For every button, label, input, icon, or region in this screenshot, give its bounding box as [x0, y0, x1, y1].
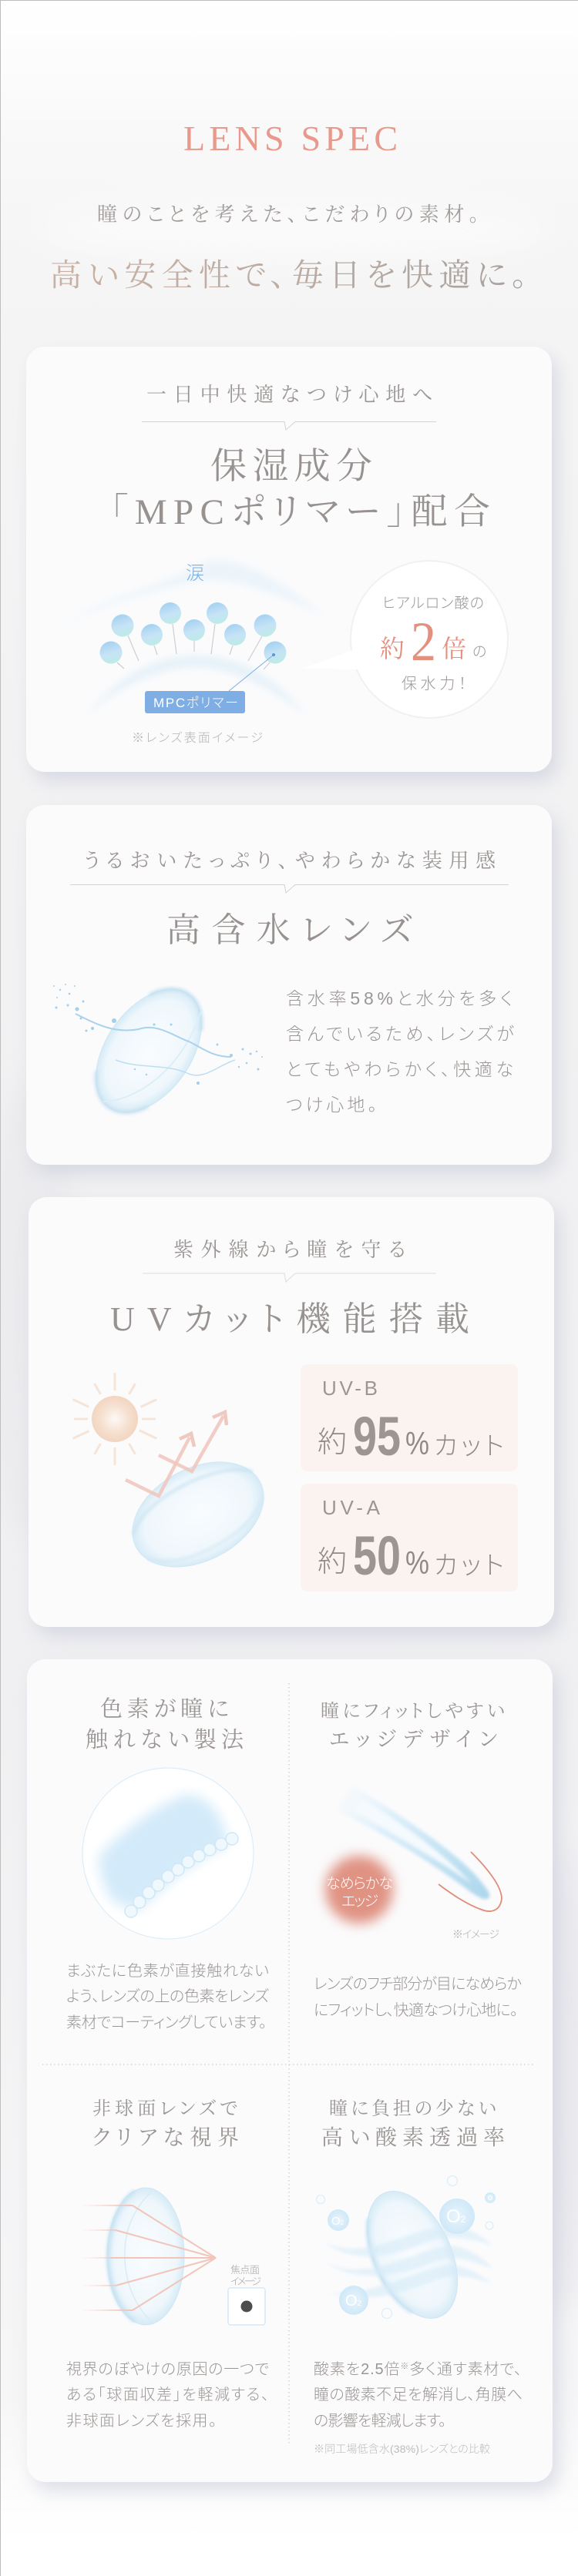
stat: UV-A 50%: 50 [353, 1526, 401, 1587]
feature text [314, 2360, 523, 2430]
oxygen bubbles: O2 [345, 2293, 362, 2309]
label: focal plane [230, 2264, 261, 2287]
illustration: lens with water splash [53, 970, 263, 1132]
illustration: oxygen passing through lens [316, 2175, 496, 2333]
polymer balls [100, 602, 287, 664]
note: image: ※イメージ [452, 1928, 499, 1940]
description text: つけ心地。 [286, 1095, 377, 1115]
feature text: 酸素を2.5倍 [314, 2361, 400, 2378]
feature heading [92, 2098, 239, 2150]
feature heading: 非球面レンズで [92, 2098, 237, 2119]
title: LENS SPEC: LENS SPEC [183, 119, 398, 158]
feature heading [321, 1701, 505, 1751]
callout: 2x water retention: 2 [411, 611, 436, 673]
description text: 含水率58%と水分を多く [286, 988, 512, 1008]
feature text: 視界のぼやけの原因の一つで [66, 2360, 269, 2378]
card 1 shadow and surface [26, 347, 558, 781]
feature text: 瞳の酸素不足を解消し、角膜へ [314, 2386, 523, 2403]
illustration: light focusing through lens [81, 2188, 265, 2325]
stat: UV-B 95% [301, 1364, 518, 1471]
callout: 2x water retention: 約 [380, 635, 405, 662]
callout: 2x water retention: 倍 [442, 635, 466, 662]
intro line: 瞳のことを考えた、こだわりの素材。 [97, 203, 479, 226]
feature text: まぶたに色素が直接触れない [66, 1962, 269, 1980]
feature text [66, 1962, 269, 2031]
feature heading: エッジデザイン [329, 1728, 497, 1751]
card 2 shadow and surface [26, 805, 558, 1174]
description text: とてもやわらかく、快適な [286, 1059, 513, 1079]
feature heading: 瞳にフィットしやすい [321, 1701, 505, 1722]
panel: four features [27, 1659, 559, 2491]
card 3 shadow and surface [29, 1197, 560, 1636]
feature heading [86, 1696, 244, 1753]
feature text: にフィットし、快適なつけ心地に。 [314, 2001, 518, 2019]
description text [286, 988, 514, 1115]
feature: oxygen permeability [314, 2098, 523, 2455]
stat: UV-A 50%: カット [434, 1551, 504, 1579]
callout: 2x water retention [302, 561, 508, 718]
stat: UV-B 95%: 約 [318, 1427, 347, 1459]
feature heading [321, 2098, 505, 2150]
label: tear: 涙 [186, 563, 204, 584]
stat: UV-A 50%: 約 [318, 1546, 347, 1578]
stat: UV-B 95%: 95 [353, 1407, 401, 1467]
label: focal plane: 焦点面 [230, 2264, 260, 2276]
feature text: の影響を軽減します。 [314, 2412, 446, 2430]
feature text: よう、レンズの上の色素をレンズ [66, 1987, 269, 2005]
card 1 heading: 保湿成分 [210, 447, 372, 487]
feature: pigment-free contact [66, 1696, 269, 2031]
oxygen bubbles: O2 [331, 2215, 344, 2228]
stat: UV-B 95%: UV-B [322, 1377, 378, 1400]
card 2 lead text: うるおいたっぷり、やわらかな装用感 [84, 850, 496, 872]
diagram: MPC polymer molecules [63, 560, 325, 716]
footnote: ※同工場低含水(38%)レンズとの比較 [314, 2443, 490, 2455]
feature text: レンズのフチ部分が目になめらか [314, 1975, 522, 1993]
feature text: 非球面レンズを採用。 [66, 2412, 217, 2430]
card 1 heading [110, 447, 490, 532]
feature text [314, 1975, 522, 2019]
stat: UV-B 95%: % [405, 1425, 429, 1461]
stat: UV-A 50%: % [405, 1545, 429, 1581]
callout: 2x water retention: の [472, 644, 486, 660]
label: MPC polymer: MPCポリマー [153, 696, 238, 710]
illustration: sun and lens [73, 1373, 282, 1588]
illustration: lens edge [338, 1785, 502, 1911]
feature text: 素材でコーティングしています。 [66, 2014, 267, 2031]
panel: MPC polymer [26, 347, 558, 781]
oxygen bubbles: O2 [446, 2206, 466, 2227]
callout: 2x water retention: ヒアルロン酸の [382, 595, 484, 612]
panel: high water content [26, 805, 558, 1174]
badge: smooth edge: なめらかな [326, 1876, 393, 1892]
badge: smooth edge [325, 1856, 393, 1924]
card 1 lead text: 一日中快適なつけ心地へ [146, 384, 432, 406]
label: MPC polymer [145, 691, 245, 713]
callout: 2x water retention: 保水力！ [402, 675, 466, 693]
feature heading: 色素が瞳に [100, 1696, 229, 1722]
feature text: ※ [400, 2362, 408, 2371]
badge: smooth edge: エッジ [341, 1893, 378, 1910]
feature text: 多く通す素材で、 [409, 2360, 522, 2378]
description text: 含んでいるため、レンズが [286, 1024, 514, 1044]
feature text: ある「球面収差」を軽減する、 [66, 2386, 269, 2403]
note: lens surface image: ※レンズ表面イメージ [132, 731, 263, 745]
stat: UV-A 50% [301, 1484, 518, 1592]
stat: UV-B 95%: カット [434, 1431, 504, 1460]
card 3 heading: UVカット機能搭載 [110, 1300, 469, 1338]
polymer sticks [117, 624, 270, 669]
feature heading: 触れない製法 [86, 1727, 244, 1753]
feature: edge design [314, 1701, 522, 2019]
main heading: 高い安全性で、毎日を快適に。 [50, 257, 528, 293]
card 3 lead text: 紫外線から瞳を守る [173, 1239, 405, 1261]
feature heading: 瞳に負担の少ない [329, 2098, 496, 2119]
illustration: lens cross-section [82, 1768, 254, 1939]
feature text [66, 2360, 269, 2430]
card 2 heading: 高含水レンズ [166, 911, 412, 949]
card 1 heading: 「MPCポリマー」配合 [110, 492, 490, 532]
label: focal plane: イメージ [230, 2276, 261, 2287]
card 4 shadow and surface [27, 1659, 559, 2491]
oxygen bubbles [316, 2175, 496, 2319]
panel: UV cut [29, 1197, 560, 1636]
feature heading: 高い酸素透過率 [321, 2125, 505, 2150]
stat: UV-A 50%: UV-A [322, 1496, 381, 1519]
feature: aspheric lens [66, 2098, 269, 2430]
feature heading: クリアな視界 [92, 2125, 239, 2150]
focal plane box [228, 2288, 265, 2325]
